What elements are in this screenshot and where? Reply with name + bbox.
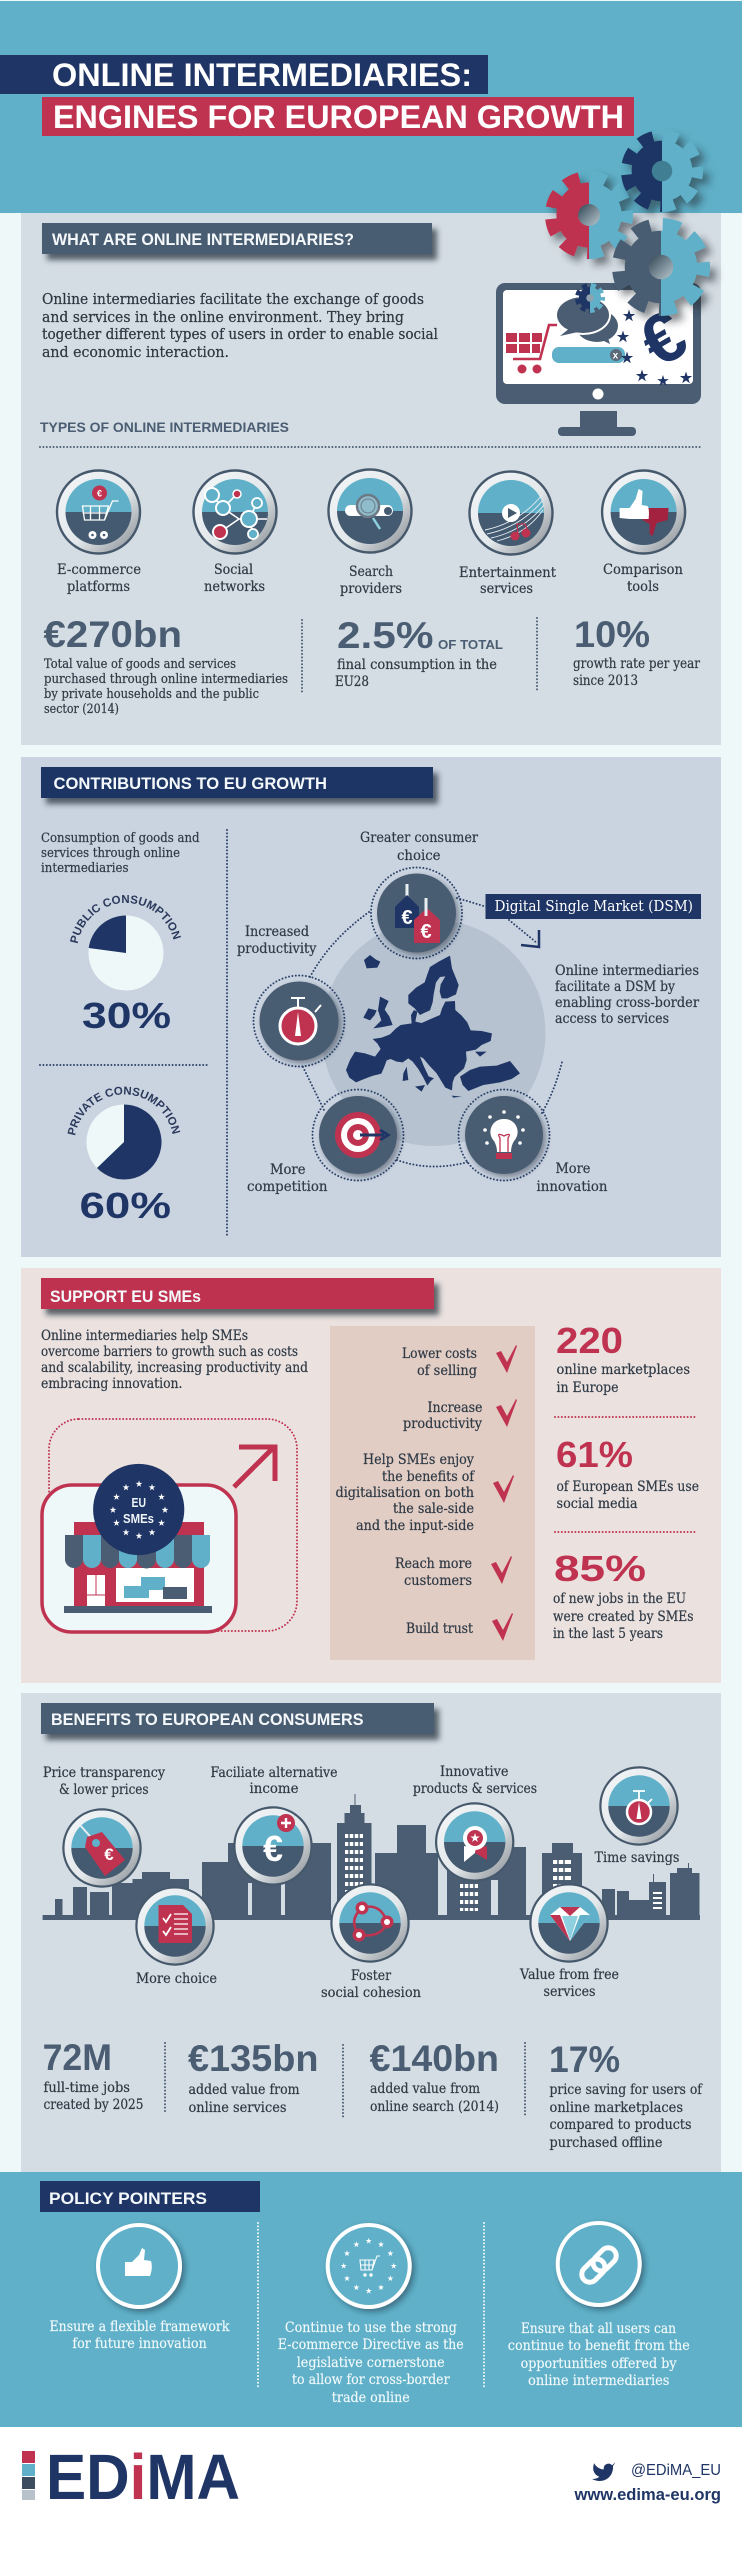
stat: 270bn total value: purchased through online intermediaries [44,672,288,687]
pointer: all users benefit: continue to benefit from the [508,2338,690,2354]
stat: 17% price saving: purchased offline [550,2135,663,2151]
DSM explanation text: Online intermediaries [555,963,699,979]
panel: SME benefit checklist: digitalisation on both [336,1485,474,1501]
type: search providers: providers [340,581,402,597]
panel: SME benefit checklist: the sale-side [393,1501,474,1517]
type: entertainment services: Entertainment [459,565,557,581]
benefit: alternative income [210,1765,338,1885]
stat: 72M jobs: 72M [43,2037,112,2078]
stat: 220 marketplaces [556,1320,690,1396]
type: e-commerce platforms: € [97,488,102,498]
stat: 2.5 percent of total: final consumption in the [337,657,497,673]
node: greater consumer choice: € [420,921,432,943]
consumption intro text [41,831,200,876]
connecting dotted network [303,898,562,1167]
type: comparison tools: Comparison [603,562,683,578]
stat: 140bn online search: €140bn [370,2038,499,2079]
type: search providers: Search [349,564,393,580]
stat: 2.5 percent of total: EU28 [335,674,369,690]
benefit: alternative income: € [263,1828,283,1869]
icon: computer monitor with online marketplace scene: x [613,350,619,362]
pointer: e-commerce directive: trade online [332,2390,410,2406]
panel: contributions to EU growth [21,757,721,1257]
stat: 72M jobs: full-time jobs [44,2080,130,2096]
benefit: value from free services [519,1884,619,2000]
sub-heading: types of online intermediaries: TYPES OF ONLINE INTERMEDIARIES [40,419,289,435]
type: entertainment services: services [480,581,533,597]
pie chart: private consumption 60%: 60% [80,1185,171,1226]
type: entertainment services [459,472,557,597]
panel: policy pointers [0,2172,742,2427]
benefit: more choice [136,1887,217,1987]
pie chart: public consumption 30% [70,895,181,1036]
panel: SME benefit checklist [330,1326,535,1660]
panel: SME benefit checklist: the benefits of [382,1469,475,1485]
section heading: benefits [41,1703,434,1734]
stat: 85% new jobs: of new jobs in the EU [553,1591,686,1607]
panel: SME benefit checklist: productivity [403,1416,482,1432]
intro paragraph: Online intermediaries facilitate the exchange of goods [42,290,424,308]
panel: what are online intermediaries [21,213,721,745]
city skyline [43,1794,700,1920]
panel: SME benefit checklist: customers [404,1573,472,1589]
stat: 270bn total value: sector (2014) [44,702,119,717]
stat: 17% price saving: online marketplaces [550,2100,683,2116]
callout: digital single market: Digital Single Market (DSM) [494,897,693,915]
stat: 10 percent growth: growth rate per year [573,656,700,672]
benefit: time savings [594,1767,680,1866]
panel: SME benefit checklist: Reach more [395,1556,472,1572]
pointer: flexible framework: Ensure a flexible framework [50,2319,230,2335]
benefit: time savings: Time savings [594,1850,680,1866]
stat: 17% price saving: price saving for users of [550,2082,703,2098]
header graphic: gears [552,137,702,308]
SME paragraph: overcome barriers to growth such as costs [41,1344,298,1360]
node: more innovation: innovation [536,1179,608,1195]
type: comparison tools [602,470,685,595]
website: www.edima-eu.org [574,2485,721,2504]
SME paragraph: and scalability, increasing productivity and [41,1360,308,1376]
node: more competition [247,1090,404,1195]
illustration: growing EU SME shop: SMEs [123,1511,154,1526]
node: increased productivity: Increased [245,924,309,940]
stat: 10 percent growth [573,614,700,689]
section heading: what are online intermediaries: WHAT ARE ONLINE INTERMEDIARIES? [52,231,354,249]
intro paragraph: and economic interaction. [42,343,229,361]
panel: SME benefit checklist: Build trust [406,1621,474,1637]
title: ENGINES FOR EUROPEAN GROWTH [53,99,624,135]
type: e-commerce platforms: E-commerce [57,562,141,578]
stat: 61% social media: of European SMEs use [556,1479,699,1495]
stat: 270bn total value: €270bn [44,614,182,655]
benefit: innovative products [413,1764,537,1881]
node: more competition: More [270,1162,306,1178]
stat: 220 marketplaces: 220 [556,1320,623,1361]
stat: 17% price saving: compared to products [550,2117,692,2133]
stat: 61% social media [556,1434,699,1512]
node: more innovation [458,1090,608,1195]
consumption intro text: Consumption of goods and [41,831,200,846]
pointer: flexible framework [50,2225,230,2352]
benefit: foster social cohesion: Foster [351,1968,391,1984]
stat: 85% new jobs: were created by SMEs [553,1609,694,1625]
stat: 140bn online search: online search (2014) [370,2099,499,2115]
type: social networks: Social [214,562,253,578]
section heading: benefits: BENEFITS TO EUROPEAN CONSUMERS [51,1711,364,1729]
logo: EDiMA: EDiMA [46,2441,240,2513]
stat: 220 marketplaces: in Europe [556,1380,618,1396]
pointer: all users benefit: opportunities offered by [521,2356,677,2372]
pointer: e-commerce directive: E-commerce Directive as the [278,2337,464,2353]
benefit: foster social cohesion: social cohesion [321,1985,421,2001]
pointer: all users benefit [508,2223,690,2389]
section heading: contributions [41,767,433,798]
intro paragraph: and services in the online environment. They bring [42,308,404,326]
node: greater consumer choice: € [401,907,413,929]
section heading: policy pointers: POLICY POINTERS [49,2190,207,2208]
stat: 10 percent growth: since 2013 [573,673,638,689]
stat: 85% new jobs [553,1548,694,1642]
intro paragraph: together different types of users in order to enable social [42,325,438,343]
SME paragraph: Online intermediaries help SMEs [41,1328,248,1344]
node: greater consumer choice: Greater consumer [360,830,479,846]
stat: 140bn online search: added value from [370,2081,480,2097]
stat: 72M jobs: created by 2025 [44,2097,144,2113]
panel: benefits to European consumers [21,1693,721,2173]
header band [0,1,742,213]
pointer: all users benefit: online intermediaries [528,2373,670,2389]
pointer: e-commerce directive: Continue to use the strong [285,2320,457,2336]
type: search providers [328,470,412,597]
pie chart: private consumption 60%: PRIVATE CONSUMPTION [68,1086,180,1136]
pointer: flexible framework: for future innovation [72,2336,207,2352]
pointer: e-commerce directive: legislative cornerstone [297,2355,445,2371]
benefit: alternative income: Faciliate alternative [210,1765,338,1781]
benefit: value from free services: services [544,1984,596,2000]
stat: 2.5 percent of total: 2.5% [337,615,434,656]
stat: 17% price saving [549,2039,703,2151]
panel: support EU SMEs [21,1268,721,1683]
icon: computer monitor with online marketplace scene [496,283,701,436]
consumption intro text: intermediaries [41,861,128,876]
DSM explanation text: enabling cross-border [555,995,700,1011]
node: increased productivity [237,924,344,1066]
stat: 135bn online services: added value from [188,2082,300,2098]
title [0,55,634,136]
icon: computer monitor with online marketplace scene: € [627,295,699,382]
stat: 2.5 percent of total: OF TOTAL [438,637,503,652]
benefit: price transparency: Price transparency [43,1765,165,1781]
stat: 85% new jobs: 85% [554,1548,646,1589]
pointer: e-commerce directive: to allow for cross-border [292,2372,450,2388]
stat: 10 percent growth: 10% [574,614,650,655]
section heading: support EU SMEs [41,1278,434,1309]
pointer: all users benefit: Ensure that all users can [521,2321,676,2337]
stat: 135bn online services: online services [188,2100,287,2116]
DSM explanation text: access to services [555,1011,669,1027]
stat: 2.5 percent of total [335,615,503,690]
stat: 270bn total value [44,614,288,717]
stat: 270bn total value: by private households and the public [44,687,259,702]
benefit: price transparency [43,1765,165,1887]
panel: SME benefit checklist: and the input-side [356,1518,474,1534]
node: greater consumer choice [360,830,479,958]
panel: SME benefit checklist: Increase [428,1400,483,1416]
icon: twitter bird [592,2462,615,2481]
stat: 140bn online search [370,2038,499,2115]
consumption intro text: services through online [41,846,180,861]
stat: 61% social media: 61% [556,1434,633,1475]
stat: 135bn online services: €135bn [188,2038,318,2079]
pie chart: private consumption 60% [68,1086,180,1226]
node: increased productivity: productivity [237,941,317,957]
pie chart: public consumption 30%: PUBLIC CONSUMPTION [70,895,181,944]
section heading: contributions: CONTRIBUTIONS TO EU GROWTH [54,775,327,793]
stat: 61% social media: social media [556,1496,638,1512]
panel: SME benefit checklist: Lower costs [402,1346,477,1362]
benefit: foster social cohesion [321,1884,421,2001]
benefit: innovative products: Innovative [440,1764,509,1780]
node: more competition: competition [247,1179,328,1195]
section heading: what are online intermediaries [42,223,432,254]
SME paragraph [41,1328,308,1392]
map of Europe on grey disc [322,920,546,1146]
benefit: price transparency: & lower prices [59,1782,149,1798]
footer background [0,2427,742,2560]
DSM explanation text: facilitate a DSM by [555,979,675,995]
panel: SME benefit checklist: of selling [417,1363,477,1379]
section heading: support EU SMEs: SUPPORT EU SMEs [50,1288,201,1306]
stat: 72M jobs [43,2037,144,2113]
benefit: value from free services: Value from free [519,1967,619,1983]
DSM explanation text [555,963,700,1027]
pointer: e-commerce directive [278,2225,464,2406]
type: social networks [194,470,276,595]
node: more innovation: More [556,1161,590,1177]
illustration: growing EU SME shop: EU [132,1495,146,1510]
stat: 17% price saving: 17% [549,2039,620,2080]
benefit: more choice: More choice [136,1971,217,1987]
callout: digital single market [486,894,701,919]
intro paragraph [42,290,438,361]
pie chart: public consumption 30%: 30% [82,995,171,1036]
panel: SME benefit checklist: Help SMEs enjoy [363,1452,474,1468]
stat: 85% new jobs: in the last 5 years [553,1626,663,1642]
benefit: price transparency: € [104,1845,114,1864]
benefit: alternative income: income [250,1781,299,1797]
twitter handle: @EDiMA_EU [631,2462,721,2479]
stat: 220 marketplaces: online marketplaces [556,1362,690,1378]
benefit: innovative products: products & services [413,1781,537,1797]
stat: 135bn online services [188,2038,318,2116]
type: comparison tools: tools [627,579,659,595]
arrow corner [521,930,539,947]
title: ONLINE INTERMEDIARIES: [52,57,472,93]
SME paragraph: embracing innovation. [41,1376,182,1392]
type: e-commerce platforms [57,470,141,595]
illustration: growing EU SME shop [42,1419,297,1632]
section heading: policy pointers [40,2181,260,2212]
node: greater consumer choice: choice [397,848,440,864]
type: e-commerce platforms: platforms [67,579,130,595]
type: social networks: networks [204,579,265,595]
stat: 270bn total value: Total value of goods and services [44,657,236,672]
